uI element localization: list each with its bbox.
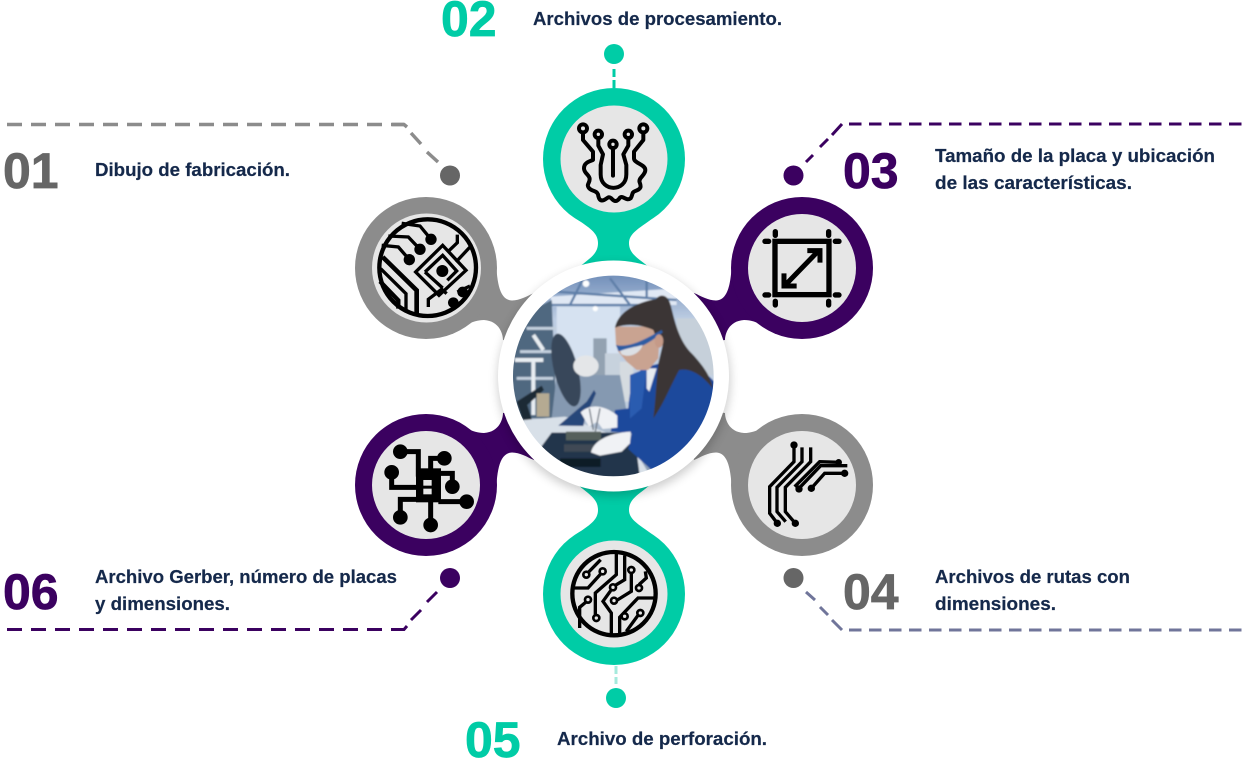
leader line 05 [606, 666, 626, 708]
label 05: Archivo de perforación. [557, 729, 767, 749]
label 03 [935, 146, 1215, 193]
number 06: 06 [3, 564, 59, 620]
label 04: Archivos de rutas con [935, 567, 1130, 587]
label 04: dimensiones. [935, 594, 1056, 614]
leader line 03 [784, 124, 1243, 186]
icon: circuit chip [379, 219, 476, 316]
number 03: 03 [843, 143, 899, 199]
number 04: 04 [843, 564, 899, 620]
center photo: technician at workbench [498, 260, 730, 496]
label 06: y dimensiones. [95, 594, 230, 614]
icon: diagonal traces [770, 441, 848, 527]
label 03: Tamaño de la placa y ubicación [935, 146, 1215, 166]
leader line 01 [7, 124, 460, 186]
number 01: 01 [3, 143, 59, 199]
label 06: Archivo Gerber, número de placas [95, 567, 397, 587]
label 03: de las características. [935, 173, 1132, 193]
icon: resize square [765, 232, 839, 305]
label 04 [935, 567, 1130, 614]
node 02 teal [543, 88, 685, 268]
node 04 gray [683, 408, 873, 556]
node 05 teal [543, 485, 685, 665]
leader line 06 [7, 568, 460, 630]
label 01: Dibujo de fabricación. [95, 160, 290, 180]
icon: round circuit board [572, 552, 656, 635]
icon: chip nodes [384, 444, 474, 532]
node 03 purple [683, 197, 873, 345]
label 02: Archivos de procesamiento. [533, 9, 782, 29]
leader line 02 [604, 44, 624, 88]
leader line 04 [784, 568, 1243, 630]
node 01 gray [355, 197, 545, 345]
node 06 purple [355, 408, 545, 556]
icon: gear with circuit traces [579, 124, 647, 201]
label 06 [95, 567, 397, 614]
